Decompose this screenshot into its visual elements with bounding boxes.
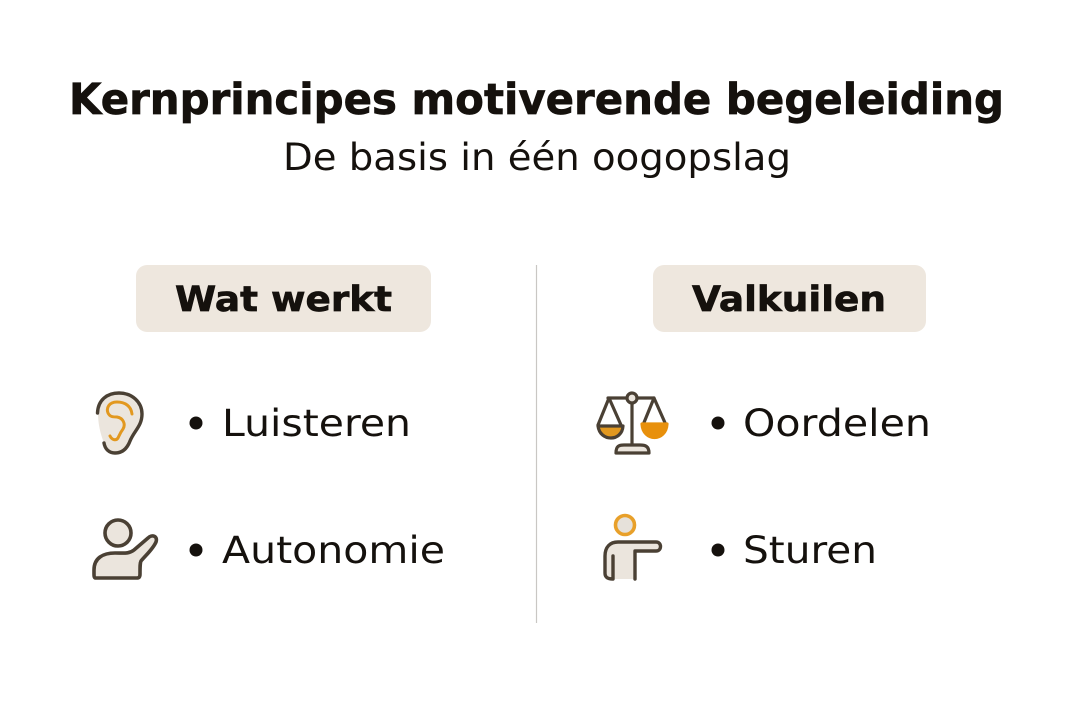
heading badge: valkuilen: [653, 265, 926, 332]
icon: raised hand person: [94, 520, 156, 578]
heading badge: valkuilen: Valkuilen: [692, 280, 886, 320]
item: sturen: Sturen: [743, 529, 877, 572]
panel: valkuilen: [598, 265, 931, 579]
heading badge: wat werkt: Wat werkt: [175, 280, 392, 320]
item: luisteren: Luisteren: [222, 402, 411, 445]
title: Kernprincipes motiverende begeleiding: [69, 75, 1004, 125]
icon: pointing person: [605, 516, 661, 579]
item: oordelen: Oordelen: [743, 402, 931, 445]
icon: ear: [98, 393, 142, 453]
panel: wat werkt: [94, 265, 445, 578]
heading badge: wat werkt: [136, 265, 431, 332]
subtitle: De basis in één oogopslag: [283, 136, 791, 179]
item: autonomie: Autonomie: [222, 529, 445, 572]
icon: scales: [598, 393, 667, 453]
